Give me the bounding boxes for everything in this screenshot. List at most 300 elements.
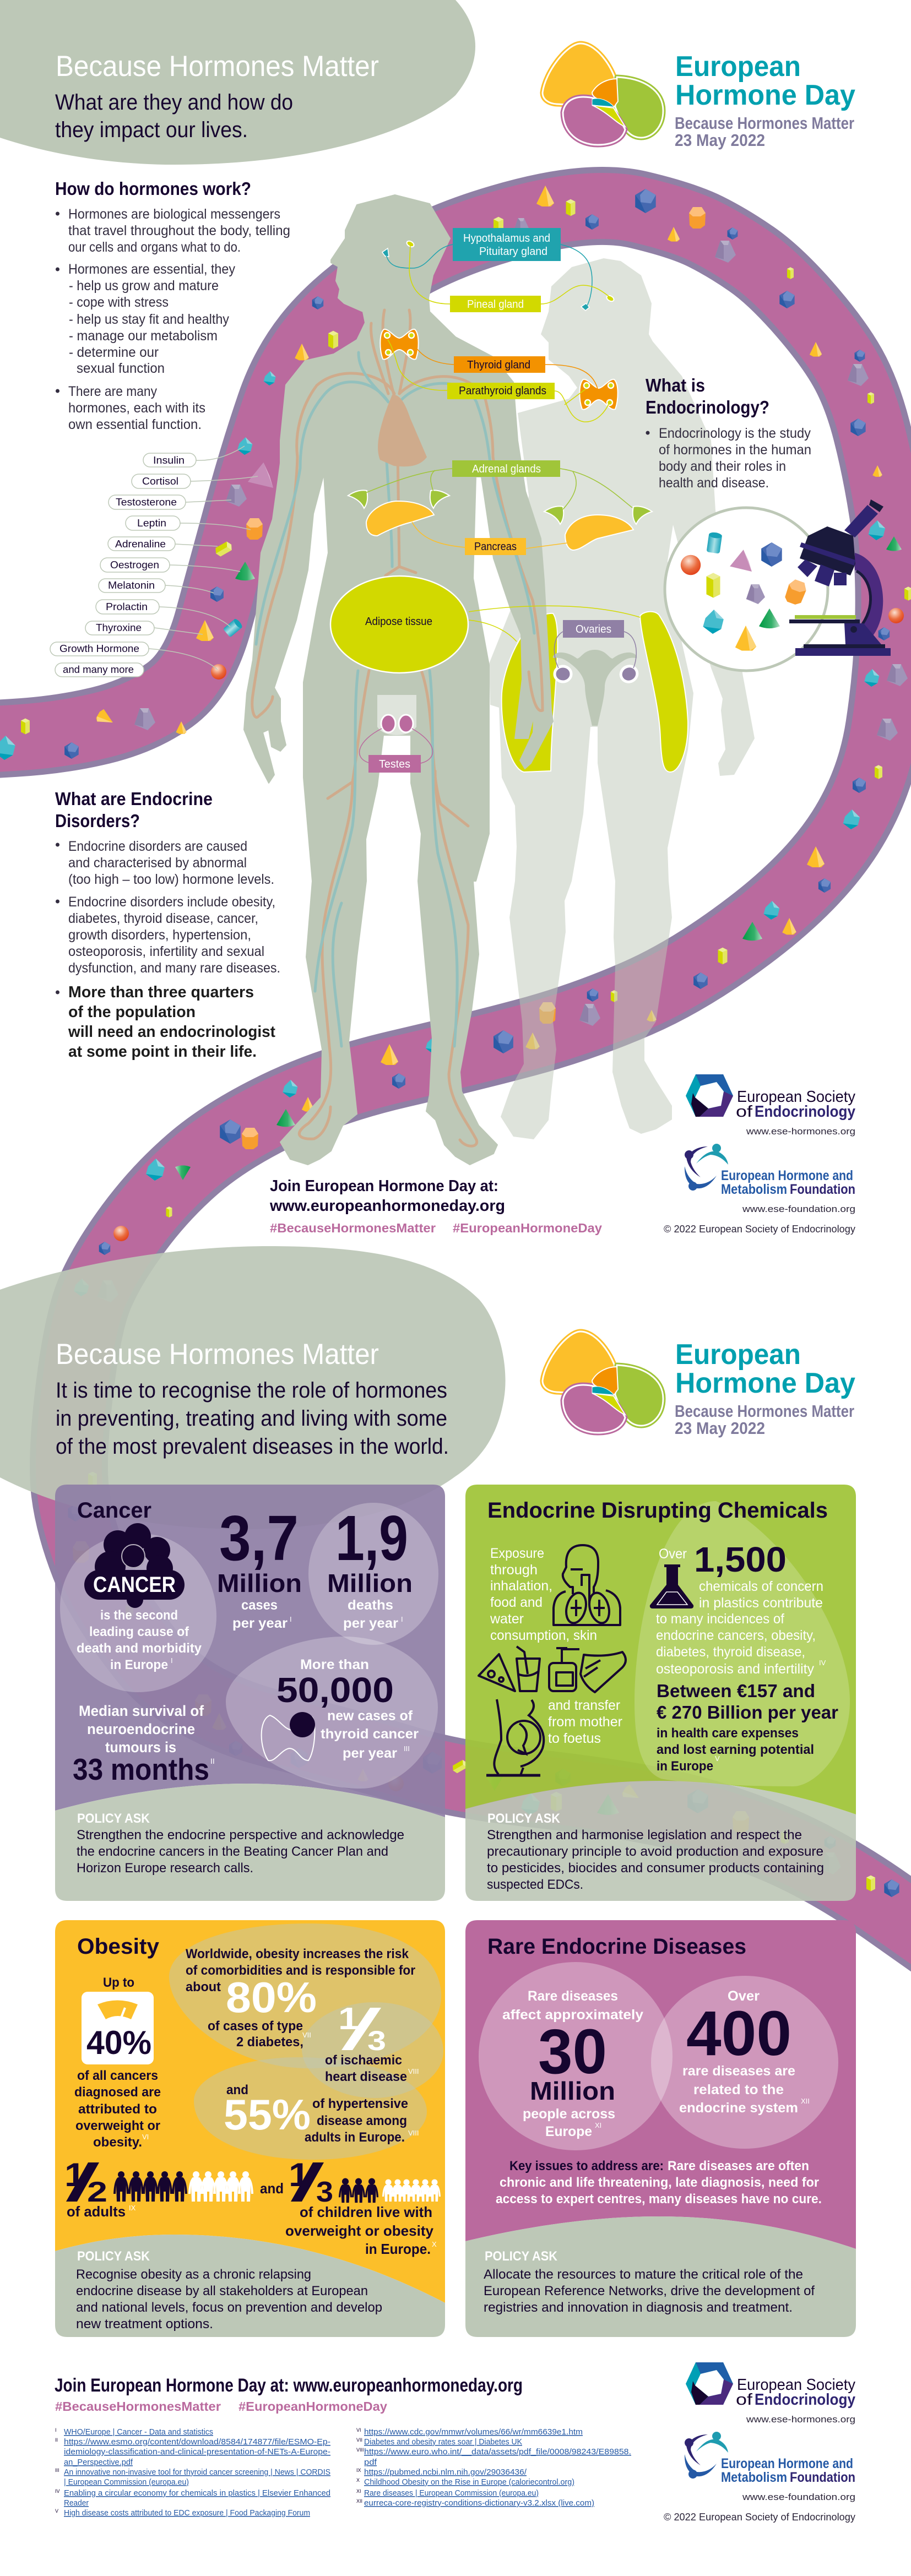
EDC translucent blob — [635, 1501, 850, 1786]
30 million stat: people across — [523, 2106, 615, 2122]
How do hormones work text: There are many — [68, 384, 157, 399]
comorbidities text: adults in Europe. — [305, 2130, 405, 2145]
panel: rare endocrine diseases — [465, 1920, 856, 2337]
ESE and Foundation logos: Foundation — [790, 1182, 855, 1197]
obesity policy ask: new treatment options. — [76, 2317, 213, 2332]
male adrenal glands — [348, 490, 449, 508]
one third of children: X — [432, 2240, 437, 2248]
How do hormones work text: own essential function. — [68, 417, 202, 432]
reference numerals left: I — [55, 2427, 57, 2433]
What are Endocrine Disorders text: What are Endocrine — [55, 789, 213, 809]
hormone names: Leptin — [137, 518, 166, 529]
European Hormone Day logo second: Hormone Day — [675, 1367, 855, 1399]
40 percent stat: obesity. — [93, 2135, 142, 2150]
exposure text: Exposure — [490, 1546, 544, 1561]
exposure text: from mother — [548, 1714, 622, 1730]
references right column: pdf — [364, 2458, 377, 2467]
hormone names: Oestrogen — [110, 559, 159, 570]
What are Endocrine Disorders text: diabetes, thyroid disease, cancer, — [68, 911, 258, 926]
obesity blobs — [169, 1923, 443, 2160]
uterus — [553, 650, 637, 726]
obesity heading: Obesity — [77, 1934, 160, 1959]
hormone names: and many more — [63, 664, 134, 675]
cancer blobs — [60, 1503, 438, 1789]
50,000 stat — [276, 1657, 419, 1761]
How do hormones work text: Hormones are biological messengers — [68, 206, 280, 222]
footer ESE and Foundation logos: Foundation — [790, 2470, 855, 2485]
40 percent stat: of all cancers — [77, 2068, 158, 2083]
European Hormone Day logo: European — [675, 51, 801, 83]
reference numerals left: III — [55, 2468, 59, 2473]
second leading cause text — [77, 1608, 202, 1672]
second subtitle: It is time to recognise the role of hormones — [56, 1378, 447, 1403]
female fat tissue right — [640, 612, 688, 772]
one third of children: in Europe. — [365, 2241, 431, 2257]
second title: Because Hormones Matter — [56, 1338, 379, 1371]
costs stat — [657, 1681, 838, 1774]
How do hormones work text: How do hormones work? — [55, 178, 251, 199]
footer join section: #BecauseHormonesMatter — [55, 2399, 221, 2414]
hormone names: Growth Hormone — [59, 643, 139, 654]
footer join section: #EuropeanHormoneDay — [238, 2399, 387, 2414]
footer ESE and Foundation logos: European Hormone and — [721, 2456, 853, 2471]
reference numerals left: V — [55, 2508, 58, 2514]
1,500 stat: IV — [819, 1659, 826, 1667]
icon: thyroid with tumour — [262, 1712, 315, 1760]
European Hormone Day logo: Because Hormones Matter — [675, 113, 854, 133]
ovaries — [555, 664, 640, 684]
How do hormones work text: our cells and organs what to do. — [68, 240, 241, 255]
How do hormones work text: - manage our metabolism — [69, 328, 218, 344]
comorbidities text: of comorbidities and is responsible for — [186, 1963, 415, 1978]
panel: obesity — [55, 1920, 445, 2337]
rare policy ask: registries and innovation in diagnosis and treatment. — [484, 2300, 793, 2315]
one half of adults: IX — [129, 2204, 136, 2212]
references left column: High disease costs attributed to EDC exposure | Food Packaging Forum — [64, 2508, 310, 2518]
cancer policy ask — [55, 1784, 445, 1901]
references left column: https://www.esmo.org/content/download/8584/174877/file/ESMO-Ep- — [64, 2437, 330, 2447]
key issues text: Key issues to address are: — [509, 2159, 664, 2173]
female pancreas — [565, 515, 633, 550]
What are Endocrine Disorders text: Disorders? — [55, 811, 140, 831]
label: hypothalamus and pituitary gland: Pituitary gland — [479, 246, 547, 258]
50,000 stat: III — [404, 1744, 410, 1753]
label: testes: Testes — [379, 758, 410, 770]
50,000 stat: new cases of — [327, 1708, 413, 1724]
one third of children: and — [260, 2180, 284, 2197]
one third of children: of children live with — [300, 2204, 432, 2220]
comorbidities text: and — [226, 2083, 248, 2097]
How do hormones work text: that travel throughout the body, telling — [68, 223, 290, 238]
30 million stat: Europe — [545, 2124, 592, 2139]
footer ESE and Foundation logos: Endocrinology — [755, 2391, 855, 2409]
European Hormone Day logo second: Because Hormones Matter — [675, 1401, 854, 1421]
comorbidities text: heart disease — [325, 2069, 407, 2084]
top subtitle: What are they and how do — [55, 90, 293, 115]
references left column: | European Commission (europa.eu) — [64, 2477, 189, 2487]
key issues text: access to expert centres, many diseases have no cure. — [496, 2192, 822, 2207]
icon: cancer cells: CANCER — [93, 1573, 176, 1597]
footer ESE and Foundation logos: www.ese-hormones.org — [746, 2414, 855, 2425]
40 percent stat — [74, 1975, 161, 2150]
1,500 stat: endocrine cancers, obesity, — [656, 1628, 816, 1643]
label: adrenal glands: Adrenal glands — [472, 463, 541, 475]
30 million stat: affect approximately — [502, 2007, 643, 2023]
footer join section: Join European Hormone Day at: www.europeanhormoneday.org — [55, 2375, 523, 2396]
hormone names: Cortisol — [142, 476, 178, 487]
400 diseases stat: 400 — [686, 1998, 791, 2069]
reference numerals right: VIII — [356, 2447, 364, 2453]
comorbidities text: 3 — [367, 2025, 386, 2056]
female thyroid — [579, 379, 618, 410]
What are Endocrine Disorders text — [55, 789, 280, 1061]
50,000 stat: thyroid cancer — [321, 1726, 419, 1742]
reference numerals right: VI — [356, 2427, 361, 2433]
female fat tissue — [502, 613, 557, 772]
top header blob — [0, 0, 475, 165]
one half of adults: 1 — [64, 2156, 85, 2193]
European Hormone Day logo second — [543, 1332, 855, 1438]
3,7 million stat: 3,7 — [219, 1502, 299, 1574]
panel: endocrine disrupting chemicals — [465, 1485, 856, 1901]
European Hormone Day logo: 23 May 2022 — [675, 131, 765, 150]
label: pancreas — [465, 538, 526, 555]
30 million stat: XI — [595, 2121, 601, 2129]
reference numerals left: II — [55, 2437, 58, 2443]
hormone ribbon with crystals — [0, 186, 911, 1949]
label: testes — [368, 755, 421, 773]
footer ESE and Foundation logos: © 2022 European Society of Endocrinology — [664, 2512, 855, 2523]
3,7 million stat: Million — [217, 1569, 302, 1597]
label: adrenal glands — [452, 460, 560, 477]
comorbidities text — [186, 1947, 419, 2145]
male pineal and pituitary — [382, 240, 415, 257]
EDC policy ask: to pesticides, biocides and consumer products containing — [487, 1861, 824, 1876]
1,500 stat: in plastics contribute — [699, 1595, 823, 1611]
hormone name pills — [50, 446, 258, 677]
second leading cause text: death and morbidity — [77, 1641, 202, 1656]
one half of adults: of adults — [67, 2203, 126, 2220]
magnifier circle with hormones — [665, 508, 828, 671]
50,000 stat: per year — [343, 1746, 397, 1761]
hormone names: Adrenaline — [115, 539, 166, 550]
references left column — [64, 2427, 330, 2518]
ESE and Foundation logos: Endocrinology — [755, 1103, 855, 1121]
adipose tissue: Adipose tissue — [365, 616, 432, 628]
30 million stat — [502, 1988, 643, 2139]
exposure text: food and — [490, 1595, 543, 1610]
rare policy ask: European Reference Networks, drive the development of — [484, 2284, 815, 2298]
What is Endocrinology text: Endocrinology is the study — [659, 426, 811, 441]
references right column: https://www.cdc.gov/mmwr/volumes/66/wr/mm6639e1.htm — [364, 2427, 583, 2437]
second subtitle: in preventing, treating and living with some — [56, 1406, 447, 1431]
What are Endocrine Disorders text: at some point in their life. — [68, 1043, 257, 1061]
references left column: Enabling a circular economy for chemicals in plastics | Elsevier Enhanced — [64, 2488, 330, 2498]
one third of children: 1 — [289, 2156, 310, 2193]
comorbidities text: VII — [302, 2031, 311, 2039]
one third of children: 3 — [316, 2176, 333, 2208]
30 million stat: Million — [530, 2077, 615, 2105]
30 million stat: 30 — [538, 2017, 607, 2087]
ESE and Foundation logos: European Society — [737, 1088, 855, 1106]
obesity policy ask — [55, 2235, 445, 2337]
references right column: https://pubmed.ncbi.nlm.nih.gov/29036436/ — [364, 2468, 527, 2477]
reference numerals left — [55, 2427, 60, 2514]
pineal and pituitary female — [581, 295, 615, 311]
label: pancreas: Pancreas — [474, 541, 517, 553]
median survival stat: Median survival of — [79, 1703, 204, 1719]
hormone names: Testosterone — [116, 497, 177, 508]
footer ESE and Foundation logos: Metabolism — [721, 2470, 787, 2485]
How do hormones work text: - cope with stress — [69, 295, 169, 310]
reference numerals right: XII — [356, 2498, 362, 2504]
male body silhouette — [244, 195, 553, 1165]
references left column: WHO/Europe | Cancer - Data and statistics — [64, 2427, 213, 2437]
second leading cause text: is the second — [100, 1608, 178, 1623]
40 percent stat: Up to — [103, 1975, 134, 1990]
30 million stat: Rare diseases — [528, 1988, 618, 2004]
comorbidities text: disease among — [317, 2113, 407, 2128]
How do hormones work text: - help us stay fit and healthy — [69, 312, 229, 327]
3,7 million stat: cases — [241, 1597, 278, 1613]
references right column — [364, 2427, 631, 2508]
EDC policy ask: suspected EDCs. — [487, 1877, 583, 1892]
400 diseases stat: related to the — [693, 2082, 784, 2097]
3,7 million stat: I — [290, 1615, 292, 1623]
second header blob — [0, 1246, 506, 1529]
median survival stat: II — [210, 1757, 215, 1765]
footer ESE and Foundation logos: of — [736, 2391, 753, 2409]
What are Endocrine Disorders text: osteoporosis, infertility and sexual — [68, 944, 264, 959]
label: thyroid gland: Thyroid gland — [467, 359, 530, 371]
1,500 stat: diabetes, thyroid disease, — [656, 1644, 805, 1660]
references right column: eurreca-core-registry-conditions-dictionary-v3.2.xlsx (live.com) — [364, 2498, 594, 2508]
1,500 stat: chemicals of concern — [699, 1579, 823, 1594]
label: hypothalamus and pituitary gland — [453, 228, 561, 261]
What are Endocrine Disorders text: More than three quarters — [68, 983, 254, 1001]
What are Endocrine Disorders text: and characterised by abnormal — [68, 855, 247, 871]
rare heading: Rare Endocrine Diseases — [487, 1934, 746, 1959]
adipose tissue — [330, 576, 468, 673]
comorbidities text: of cases of type — [208, 2019, 303, 2034]
How do hormones work text: Hormones are essential, they — [68, 262, 235, 277]
label: ovaries: Ovaries — [576, 623, 611, 635]
key issues text: chronic and life threatening, late diagnosis, need for — [500, 2175, 819, 2190]
male thyroid — [380, 329, 419, 360]
Join section: Join European Hormone Day at: — [270, 1177, 498, 1195]
top title: Because Hormones Matter — [56, 50, 379, 83]
top subtitle: they impact our lives. — [55, 118, 248, 142]
ESE and Foundation logos: European Hormone and — [721, 1168, 853, 1183]
exposure text: to foetus — [548, 1731, 601, 1746]
1,500 stat: Over — [659, 1546, 687, 1562]
top subtitle — [55, 90, 293, 142]
male pancreas — [366, 501, 434, 536]
one third of children: overweight or obesity — [285, 2222, 434, 2239]
reference numerals right: VII — [356, 2437, 362, 2443]
How do hormones work text — [55, 178, 290, 432]
What are Endocrine Disorders text: dysfunction, and many rare diseases. — [68, 960, 280, 976]
second subtitle: of the most prevalent diseases in the world. — [56, 1434, 449, 1459]
costs stat: V — [715, 1754, 720, 1763]
footer ESE and Foundation logos: www.ese-foundation.org — [742, 2492, 855, 2502]
Join section: #BecauseHormonesMatter — [270, 1221, 436, 1235]
What are Endocrine Disorders text: will need an endocrinologist — [68, 1023, 275, 1041]
rare policy ask: Allocate the resources to mature the critical role of the — [484, 2267, 803, 2282]
Join section — [269, 1177, 602, 1235]
comorbidities text: VIII — [408, 2129, 419, 2137]
ESE and Foundation logos — [664, 1074, 855, 1235]
EDC policy ask: Strengthen and harmonise legislation and respect the — [487, 1828, 802, 1843]
one third of children — [260, 2156, 441, 2257]
ESE and Foundation logos: of — [736, 1103, 753, 1121]
comorbidities text: of hypertensive — [312, 2096, 408, 2111]
ESE and Foundation logos: © 2022 European Society of Endocrinology — [664, 1224, 855, 1235]
hormone names — [59, 455, 185, 675]
What is Endocrinology text — [646, 375, 811, 491]
reference numerals right — [356, 2427, 364, 2504]
exposure text: water — [490, 1611, 524, 1627]
rare policy ask — [465, 2216, 856, 2337]
40 percent stat: VI — [142, 2133, 149, 2141]
costs stat: € 270 Billion per year — [657, 1702, 838, 1722]
Join section: #EuropeanHormoneDay — [453, 1221, 602, 1235]
label: pineal gland — [450, 296, 541, 312]
second leading cause text: in Europe — [110, 1657, 168, 1672]
label: parathyroid glands: Parathyroid glands — [459, 385, 546, 397]
1,9 million stat — [327, 1502, 413, 1631]
EDC policy ask — [465, 1781, 856, 1901]
reference numerals right: XI — [356, 2488, 361, 2494]
European Hormone Day logo: Hormone Day — [675, 79, 855, 111]
key issues text: Rare diseases are often — [668, 2159, 809, 2173]
median survival stat — [73, 1703, 215, 1786]
exposure text: consumption, skin — [490, 1628, 597, 1643]
1,500 stat: 1,500 — [694, 1540, 787, 1579]
50,000 stat: 50,000 — [276, 1670, 394, 1710]
icon: weighing scale: 40% — [86, 2024, 151, 2061]
obesity policy ask: and national levels, focus on prevention and develop — [76, 2300, 382, 2315]
50,000 stat: More than — [300, 1657, 369, 1672]
testes region — [377, 695, 416, 735]
1,9 million stat: per year — [343, 1616, 398, 1631]
heart — [378, 395, 427, 466]
EDC policy ask: POLICY ASK — [487, 1811, 561, 1826]
exposure text: inhalation, — [490, 1578, 552, 1594]
1,9 million stat: I — [401, 1615, 403, 1623]
cancer policy ask: POLICY ASK — [77, 1811, 150, 1826]
3,7 million stat — [217, 1502, 302, 1631]
cancer heading: Cancer — [77, 1498, 151, 1523]
exposure text — [490, 1546, 622, 1746]
reference numerals right: IX — [356, 2468, 361, 2473]
references left column: idemiology-classification-and-clinical-presentation-of-NETs-A-Europe- — [64, 2447, 330, 2457]
What is Endocrinology text: What is — [646, 375, 705, 395]
hormone names: Prolactin — [106, 601, 148, 612]
1,9 million stat: deaths — [348, 1597, 393, 1613]
Join section: www.europeanhormoneday.org — [269, 1197, 505, 1215]
reference numerals right: X — [356, 2477, 360, 2483]
ESE and Foundation logos: www.ese-foundation.org — [742, 1204, 855, 1214]
40 percent stat: overweight or — [75, 2118, 160, 2133]
costs stat: and lost earning potential — [657, 1742, 814, 1757]
European Hormone Day logo second: European — [675, 1339, 801, 1371]
cancer policy ask: the endocrine cancers in the Beating Cancer Plan and — [77, 1844, 388, 1859]
footer ESE and Foundation logos: European Society — [737, 2376, 855, 2394]
hormone names: Melatonin — [108, 580, 155, 591]
400 diseases stat: rare diseases are — [682, 2063, 795, 2079]
second leading cause text: I — [171, 1656, 173, 1665]
obesity policy ask: Recognise obesity as a chronic relapsing — [76, 2267, 311, 2282]
obesity policy ask: endocrine disease by all stakeholders at European — [76, 2284, 368, 2298]
median survival stat: neuroendocrine — [87, 1721, 195, 1737]
icon: pregnancy — [486, 1699, 544, 1775]
comorbidities text: 55% — [224, 2090, 311, 2139]
400 diseases stat: Over — [728, 1988, 760, 2004]
comorbidities text: 1 — [338, 2001, 359, 2036]
panel: cancer — [55, 1485, 445, 1901]
comorbidities text: about — [186, 1980, 221, 1995]
median survival stat: 33 months — [73, 1752, 209, 1786]
second title — [56, 1338, 449, 1459]
ESE and Foundation logos: Metabolism — [721, 1182, 787, 1197]
EDC heading: Endocrine Disrupting Chemicals — [487, 1498, 828, 1523]
female adrenal glands — [544, 506, 652, 524]
hormone names: Thyroxine — [96, 622, 142, 633]
comorbidities text: 80% — [226, 1973, 317, 2021]
European Hormone Day logo second: 23 May 2022 — [675, 1419, 765, 1438]
rare disease circles — [479, 1962, 838, 2150]
What are Endocrine Disorders text: growth disorders, hypertension, — [68, 927, 251, 943]
exposure text: through — [490, 1562, 538, 1578]
references left column: an_Perspective.pdf — [64, 2458, 133, 2467]
female body silhouette — [489, 258, 755, 1139]
ESE and Foundation logos: www.ese-hormones.org — [746, 1126, 855, 1137]
top title — [55, 50, 379, 142]
icon: cancer cells — [84, 1523, 185, 1608]
costs stat: in Europe — [657, 1759, 713, 1774]
one half of adults — [64, 2156, 253, 2220]
references left column: An innovative non-invasive tool for thyroid cancer screening | News | CORDIS — [64, 2468, 330, 2477]
leader lines — [360, 244, 640, 763]
What are Endocrine Disorders text: Endocrine disorders include obesity, — [68, 894, 275, 910]
What is Endocrinology text: health and disease. — [659, 475, 769, 491]
comorbidities text: 2 diabetes, — [236, 2035, 303, 2050]
reference numerals left: IV — [55, 2488, 60, 2494]
label: pineal gland: Pineal gland — [467, 298, 524, 311]
What are Endocrine Disorders text: (too high – too low) hormone levels. — [68, 872, 274, 887]
footer ESE and Foundation logos — [664, 2362, 855, 2523]
references right column: https://www.euro.who.int/__data/assets/pdf_file/0008/98243/E89858. — [364, 2447, 631, 2457]
second subtitle — [56, 1378, 449, 1459]
icon: respiratory system — [554, 1545, 620, 1625]
second leading cause text: leading cause of — [89, 1624, 189, 1639]
exposure text: and transfer — [548, 1698, 620, 1713]
1,9 million stat: 1,9 — [335, 1502, 408, 1574]
median survival stat: tumours is — [105, 1739, 176, 1756]
comorbidities text: Worldwide, obesity increases the risk — [186, 1947, 409, 1961]
footer join section — [55, 2375, 523, 2414]
40 percent stat: diagnosed are — [74, 2085, 161, 2100]
cancer policy ask: Horizon Europe research calls. — [77, 1861, 253, 1876]
label: ovaries — [563, 620, 624, 638]
rare policy ask: POLICY ASK — [485, 2249, 558, 2264]
How do hormones work text: - determine our — [69, 345, 159, 360]
references right column: Diabetes and obesity rates soar | Diabetes UK — [364, 2437, 522, 2447]
costs stat: in health care expenses — [657, 1726, 799, 1741]
icons: food, drink, soap, hand — [479, 1646, 626, 1692]
comorbidities text: of ischaemic — [325, 2053, 402, 2068]
